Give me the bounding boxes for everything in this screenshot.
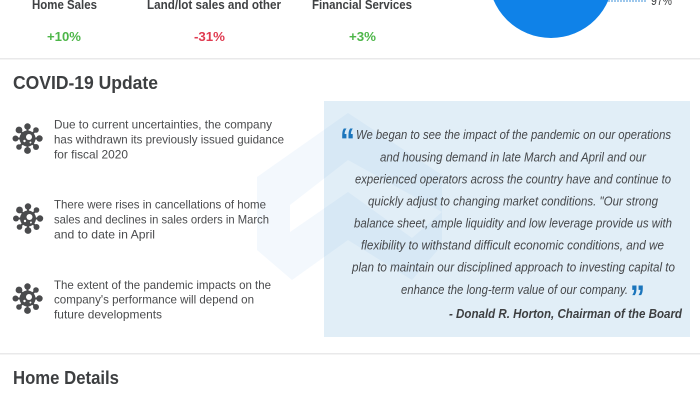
icon: virus — [12, 123, 43, 154]
text: pandemic impact: The extent of the pandemic impacts on the — [54, 278, 271, 292]
heading: covid update: COVID-19 Update — [13, 72, 158, 93]
value: land and lot change: -31% — [194, 29, 225, 44]
text: pandemic impact — [54, 278, 271, 322]
quote text: We began to see the impact of the pandemic on our operations — [356, 128, 671, 142]
watermark logo — [257, 113, 442, 280]
quote text — [340, 122, 675, 317]
quote text: enhance the long-term value of our company. — [401, 283, 628, 297]
quote text: and housing demand in late March and April and our — [380, 150, 647, 164]
quote text: flexibility to withstand difficult economic conditions, and we — [361, 238, 664, 252]
text: guidance withdrawn: Due to current uncertainties, the company — [54, 118, 272, 132]
list item: guidance withdrawn — [12, 118, 284, 162]
icon: virus — [13, 203, 43, 234]
icon: closing quote mark: ” — [630, 279, 645, 317]
text: cancellations — [54, 198, 269, 242]
text: guidance withdrawn: has withdrawn its previously issued guidance — [54, 132, 284, 146]
icon: virus — [12, 283, 43, 314]
text: cancellations: sales and declines in sales orders in March — [54, 212, 269, 226]
text: cancellations: There were rises in cancellations of home — [54, 198, 266, 212]
text: guidance withdrawn: for fiscal 2020 — [54, 148, 128, 162]
list item: cancellations — [13, 198, 269, 242]
panel: revenue segments — [32, 0, 412, 44]
value: financial services change: +3% — [349, 29, 376, 44]
quote text: experienced operators across the country have and continue to — [355, 172, 671, 186]
icon: opening quote mark: “ — [340, 122, 355, 160]
list item: pandemic impact — [12, 278, 271, 322]
pie chart — [488, 0, 672, 38]
panel: quote background — [324, 101, 690, 337]
text: cancellations: and to date in April — [54, 228, 155, 242]
text: pandemic impact: future developments — [54, 308, 162, 322]
quote text: balance sheet, ample liquidity and low leverage provide us with — [354, 216, 672, 230]
value: home sales change: +10% — [47, 29, 81, 44]
quote text: plan to maintain our disciplined approach to investing capital to — [351, 260, 675, 274]
text: guidance withdrawn — [54, 118, 284, 162]
quote text: quickly adjust to changing market conditions. "Our strong — [368, 194, 658, 208]
text: pandemic impact: company's performance will depend on — [54, 292, 254, 306]
heading: home details: Home Details — [13, 367, 119, 388]
